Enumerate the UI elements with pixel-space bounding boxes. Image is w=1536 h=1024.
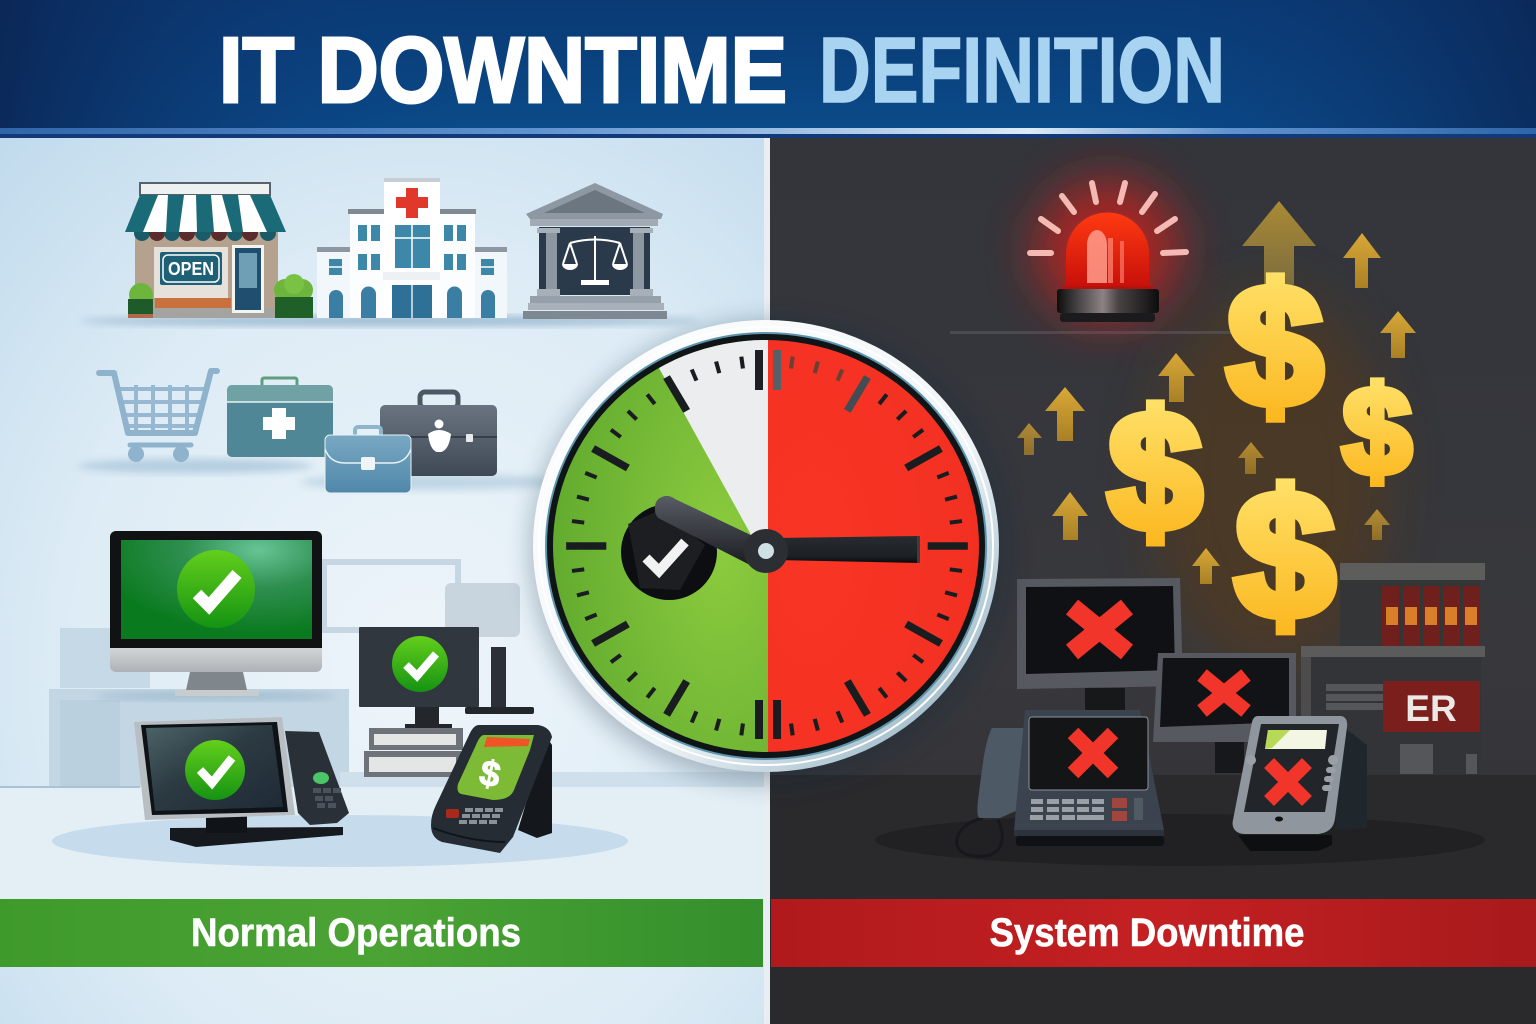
- icon: failed desk phone terminal: [957, 710, 1164, 856]
- icon: shopping cart: [99, 371, 217, 462]
- clock major ticks: [566, 377, 968, 715]
- icon: dollar signs: $: [1343, 363, 1411, 501]
- status bar: system downtime: [771, 899, 1536, 967]
- ER sign: [1383, 681, 1480, 732]
- status bar: normal operations: [0, 899, 763, 967]
- icon: courthouse: [523, 183, 667, 319]
- icon: desktop monitor with check: [110, 531, 322, 696]
- panel: system downtime background: [770, 136, 1536, 1024]
- icon: failed monitor 2: [1153, 653, 1296, 773]
- header band: [0, 0, 1536, 138]
- icon: dollar signs: $: [1227, 250, 1323, 442]
- icon: failed monitor 1: [1017, 578, 1183, 713]
- title: IT DOWNTIME: [219, 18, 787, 122]
- icon: storefront: OPEN: [168, 259, 214, 279]
- icon: upward cost arrows: [1017, 201, 1416, 584]
- icon: failed payment tablet: [1233, 716, 1367, 851]
- status bar: normal operations: Normal Operations: [191, 911, 521, 955]
- icon: green check large: [177, 550, 255, 628]
- icon: storefront: [125, 183, 313, 318]
- icon: payment terminal: [431, 725, 552, 853]
- icon: dark briefcase: [380, 392, 497, 476]
- icon: red alarm light: [1030, 180, 1186, 322]
- ER sign: ER: [1405, 688, 1457, 729]
- icon: hospital: [317, 178, 507, 318]
- icon: payment terminal: $: [476, 751, 504, 796]
- icon: first aid kit: [227, 378, 333, 457]
- icon: closed building with ER sign: [1301, 563, 1485, 775]
- clock bezel: [533, 320, 999, 772]
- icon: clock check badge: [621, 504, 717, 600]
- icon: touchscreen terminal: [134, 717, 349, 847]
- clock hour hand: [775, 536, 920, 563]
- clock: [530, 320, 1010, 784]
- icon: dollar signs: $: [1235, 455, 1335, 656]
- clock hub: [744, 529, 788, 573]
- title: DEFINITION: [819, 18, 1225, 122]
- icon: dollar signs: [1108, 250, 1411, 656]
- divider: [764, 136, 770, 1024]
- status bar: system downtime: System Downtime: [990, 911, 1304, 955]
- title: [219, 18, 1225, 122]
- panel: normal operations background: [0, 136, 764, 1024]
- clock face: [553, 340, 979, 752]
- clock 12 and 6 double ticks: [759, 350, 777, 739]
- icon: blue briefcase: [325, 427, 411, 493]
- clock minute hand: [655, 496, 755, 566]
- icon: small monitor with check: [359, 627, 534, 777]
- clock minor ticks: [572, 357, 962, 735]
- icon: dollar signs: $: [1108, 377, 1202, 565]
